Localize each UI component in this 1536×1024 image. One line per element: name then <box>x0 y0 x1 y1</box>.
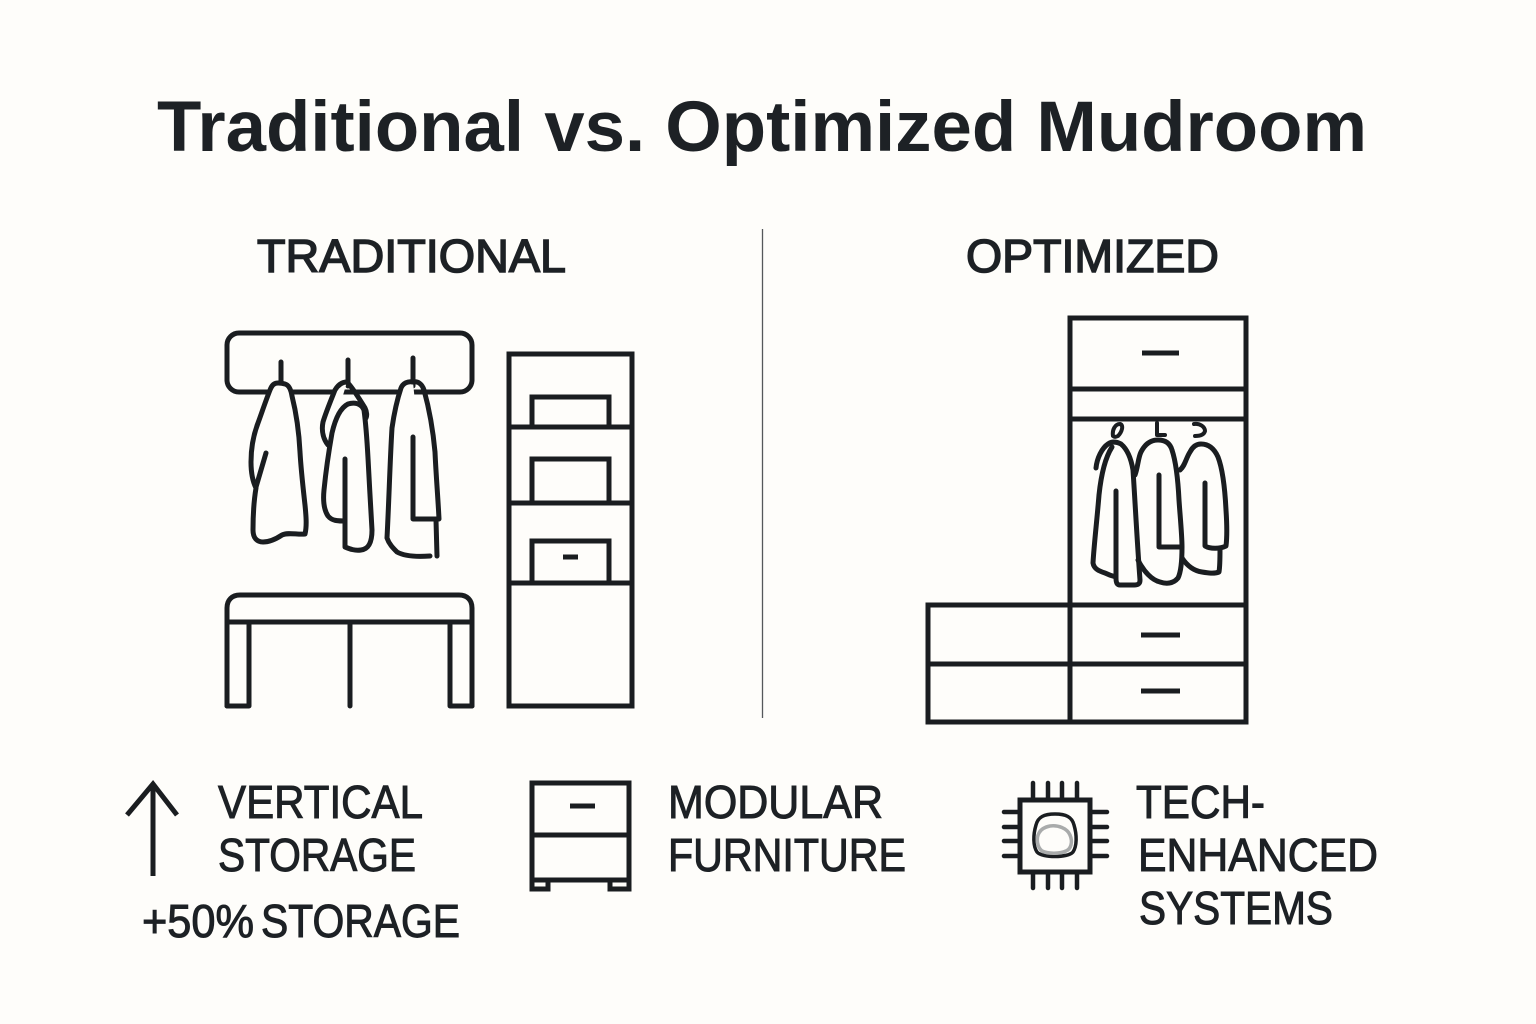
panel: optimized mudroom illustration <box>928 318 1246 722</box>
panel: traditional mudroom illustration <box>227 333 632 706</box>
icon: microchip <box>1004 783 1107 888</box>
title: Traditional vs. Optimized Mudroom <box>157 88 1367 167</box>
label: tech-enhanced systems <box>1136 776 1378 934</box>
heading: optimized: OPTIMIZED <box>966 230 1219 282</box>
icon: drawer cabinet <box>532 783 629 889</box>
feature: modular furniture <box>532 776 906 889</box>
label: vertical storage <box>218 776 423 881</box>
bench <box>227 595 472 706</box>
shelving cabinet <box>509 354 632 706</box>
side drawers <box>928 605 1070 722</box>
label: modular furniture <box>668 776 906 881</box>
wardrobe unit <box>1070 318 1246 722</box>
coat rack with hooks and coats <box>227 333 472 556</box>
label: tech-enhanced systems: ENHANCED <box>1138 829 1378 881</box>
stat: plus 50 percent storage: +50% <box>142 895 254 947</box>
icon: coat one <box>251 383 306 542</box>
label: tech-enhanced systems: TECH- <box>1136 776 1265 828</box>
heading: traditional: TRADITIONAL <box>257 230 566 282</box>
feature: tech-enhanced systems <box>1004 776 1378 934</box>
label: vertical storage: STORAGE <box>218 829 416 881</box>
icon: up arrow <box>127 784 177 876</box>
stat: plus 50 percent storage <box>142 895 460 947</box>
feature: vertical storage <box>127 776 460 947</box>
stat: plus 50 percent storage: STORAGE <box>261 895 460 947</box>
hanging coats <box>1093 423 1227 585</box>
icon: coat two <box>322 382 372 550</box>
label: modular furniture: MODULAR <box>668 776 883 828</box>
icon: coat three <box>387 382 439 556</box>
label: tech-enhanced systems: SYSTEMS <box>1139 882 1333 934</box>
label: vertical storage: VERTICAL <box>218 776 423 828</box>
label: modular furniture: FURNITURE <box>668 829 906 881</box>
